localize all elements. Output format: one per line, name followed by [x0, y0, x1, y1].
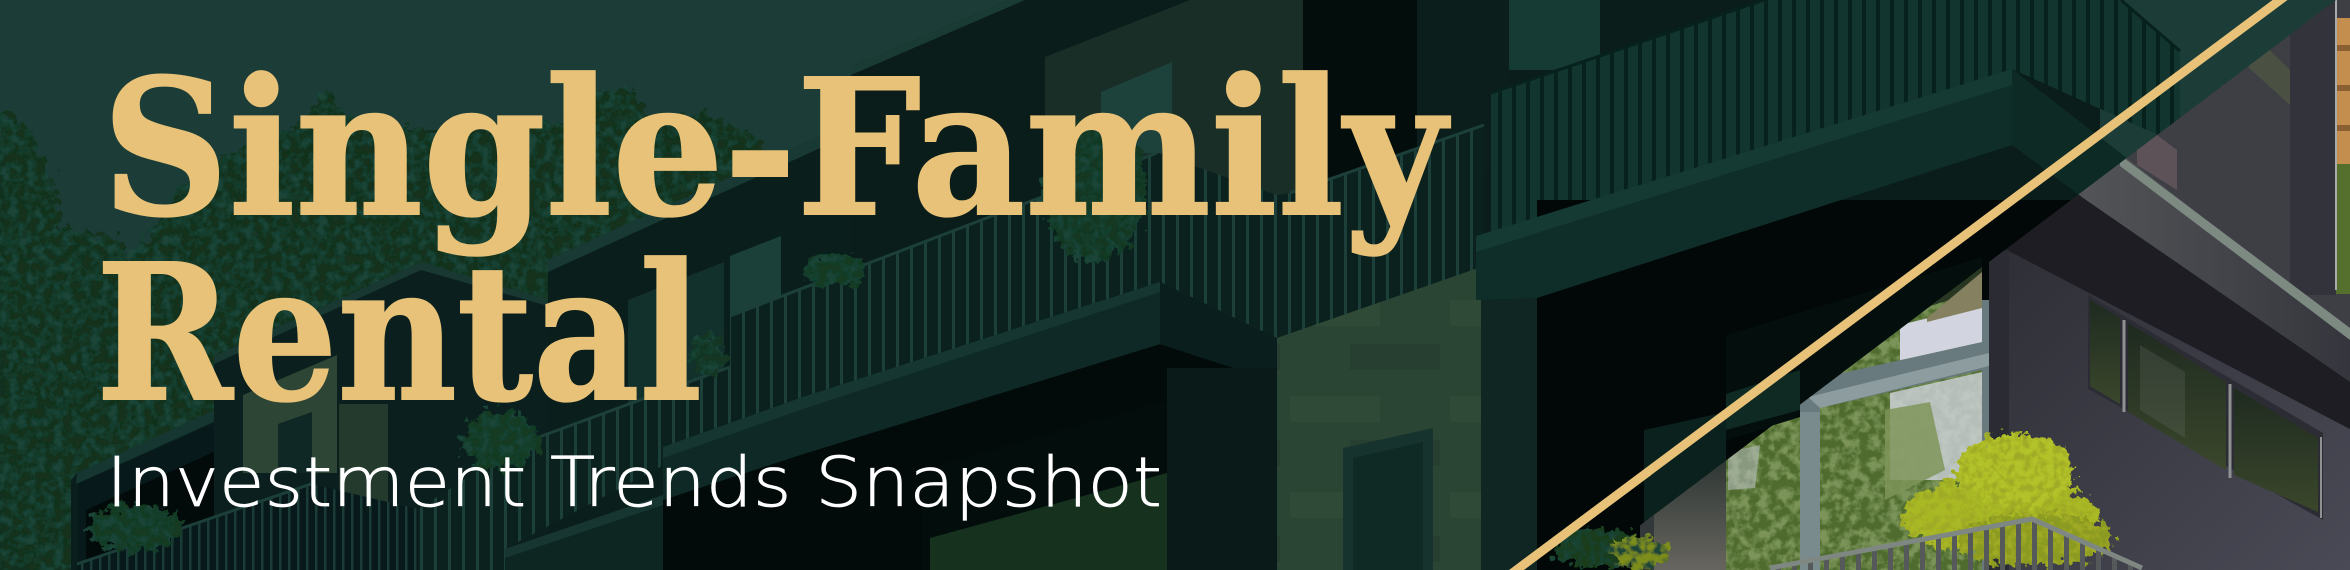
window panes with foliage — [1726, 250, 1986, 570]
background: trees — [0, 88, 850, 570]
rail — [2137, 135, 2177, 190]
wood strip — [2335, 0, 2350, 294]
wall: upper — [2126, 0, 2350, 328]
title: Single-Family — [102, 38, 1450, 259]
column — [1989, 250, 2009, 570]
building: gabled block with wood cladding — [214, 262, 548, 570]
background: trees base — [0, 130, 850, 570]
bush, bright — [1902, 434, 2115, 566]
bright scene right of the diagonal — [1640, 0, 2350, 570]
gold diagonal line — [1509, 0, 2288, 570]
wood panel — [1277, 267, 1481, 570]
balcony railing: upper right — [1491, 0, 2180, 237]
title: Rental — [96, 223, 702, 444]
title — [96, 38, 1450, 444]
main balcony slab — [663, 282, 1277, 570]
light stripe — [2120, 155, 2350, 340]
upper slab and dark underside — [1476, 69, 2350, 570]
balcony railing: main centre — [730, 125, 1484, 424]
balcony railing bright — [1767, 519, 2145, 570]
pillar — [2290, 0, 2336, 295]
soffit — [2005, 194, 2350, 429]
building: top block — [851, 0, 2100, 300]
big window frame — [1800, 300, 1989, 570]
building: upper-left roof block — [548, 122, 851, 570]
lower slab — [505, 495, 663, 570]
balcony railing: lower left — [77, 367, 730, 570]
curtain — [1644, 460, 1726, 570]
slab side — [2078, 158, 2350, 382]
window band under overlay — [1644, 257, 1982, 570]
lower window — [922, 400, 1167, 570]
mullion — [1800, 412, 1820, 570]
subtitle: Investment Trends Snapshot — [106, 443, 1162, 523]
small upper window — [2249, 50, 2290, 105]
bush, small lower left — [1554, 528, 1670, 568]
band windows — [2088, 295, 2323, 520]
lower wall — [2009, 251, 2350, 570]
shrubs on balconies — [89, 118, 1147, 552]
building: left block — [71, 402, 245, 570]
